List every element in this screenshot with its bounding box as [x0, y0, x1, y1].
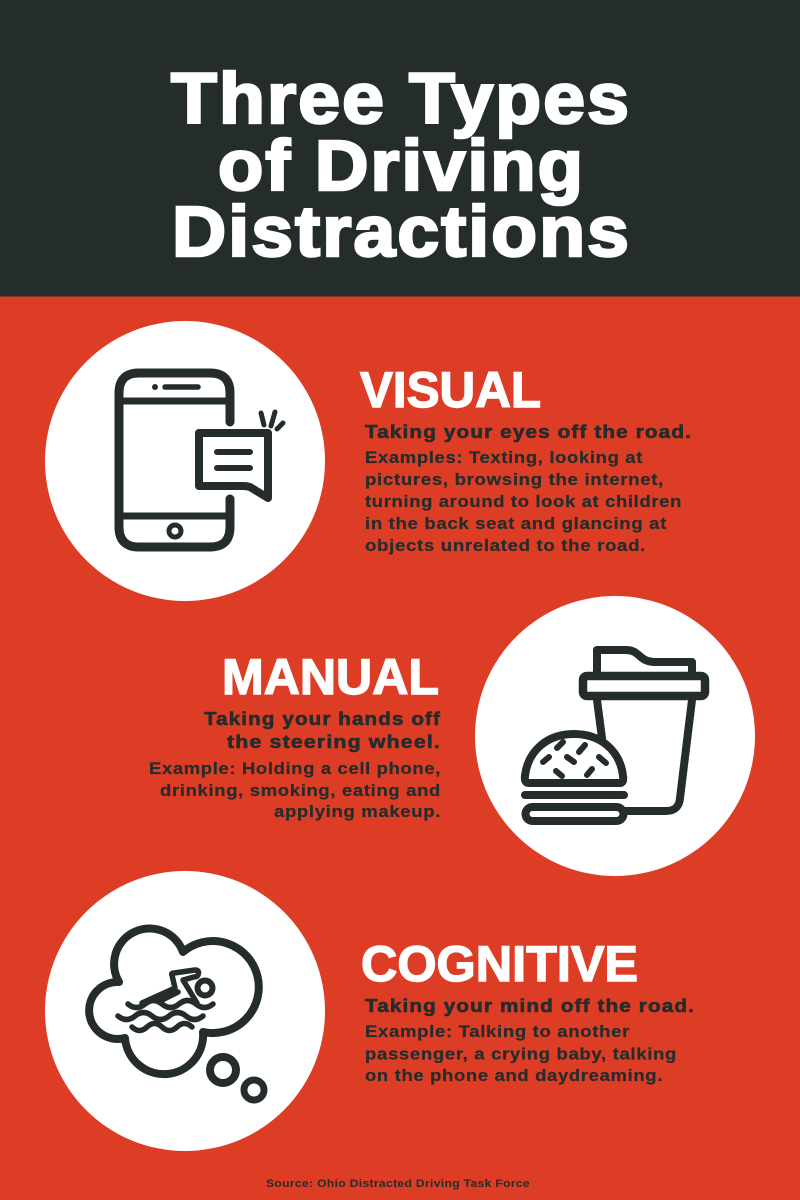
- text: cognitive examples: [365, 1022, 677, 1085]
- icon: thought cloud with swimmer: [45, 871, 325, 1151]
- text: cognitive examples: passenger, a crying baby, talking: [365, 1044, 677, 1064]
- title: Three Types: [171, 60, 631, 139]
- icon: coffee cup and burger: [475, 596, 755, 876]
- source: Source: Ohio Distracted Driving Task Force: [266, 1178, 530, 1190]
- text: manual examples: Example: Holding a cell phone,: [149, 759, 441, 778]
- title banner: [0, 0, 800, 296]
- subheading: cognitive: Taking your mind off the road.: [365, 995, 695, 1016]
- text: visual examples: turning around to look at children: [365, 492, 682, 511]
- subheading: manual: Taking your hands off: [204, 708, 441, 729]
- text: manual examples: [149, 759, 441, 821]
- heading: manual: MANUAL: [222, 649, 439, 705]
- text: cognitive examples: on the phone and daydreaming.: [365, 1066, 663, 1085]
- text: cognitive examples: Example: Talking to another: [365, 1022, 630, 1041]
- text: visual examples: objects unrelated to the road.: [365, 536, 646, 555]
- title: of Driving: [218, 127, 585, 206]
- text: visual examples: pictures, browsing the internet,: [365, 470, 664, 489]
- panel: cognitive: [45, 871, 695, 1151]
- text: visual examples: in the back seat and glancing at: [365, 514, 667, 533]
- subheading: visual: Taking your eyes off the road.: [365, 421, 692, 442]
- text: visual examples: [365, 448, 682, 555]
- text: visual examples: Examples: Texting, looking at: [365, 448, 643, 467]
- heading: visual: VISUAL: [360, 362, 541, 418]
- panel: visual: [45, 321, 692, 601]
- text: manual examples: applying makeup.: [274, 802, 441, 821]
- title: [171, 60, 631, 272]
- subheading: manual: [204, 708, 441, 752]
- icon: phone with message bubble: [45, 321, 325, 601]
- heading: cognitive: COGNITIVE: [361, 936, 638, 992]
- subheading: manual: the steering wheel.: [227, 731, 441, 752]
- panel: manual: [149, 596, 755, 876]
- title: Distractions: [172, 193, 631, 272]
- text: manual examples: drinking, smoking, eating and: [160, 781, 441, 800]
